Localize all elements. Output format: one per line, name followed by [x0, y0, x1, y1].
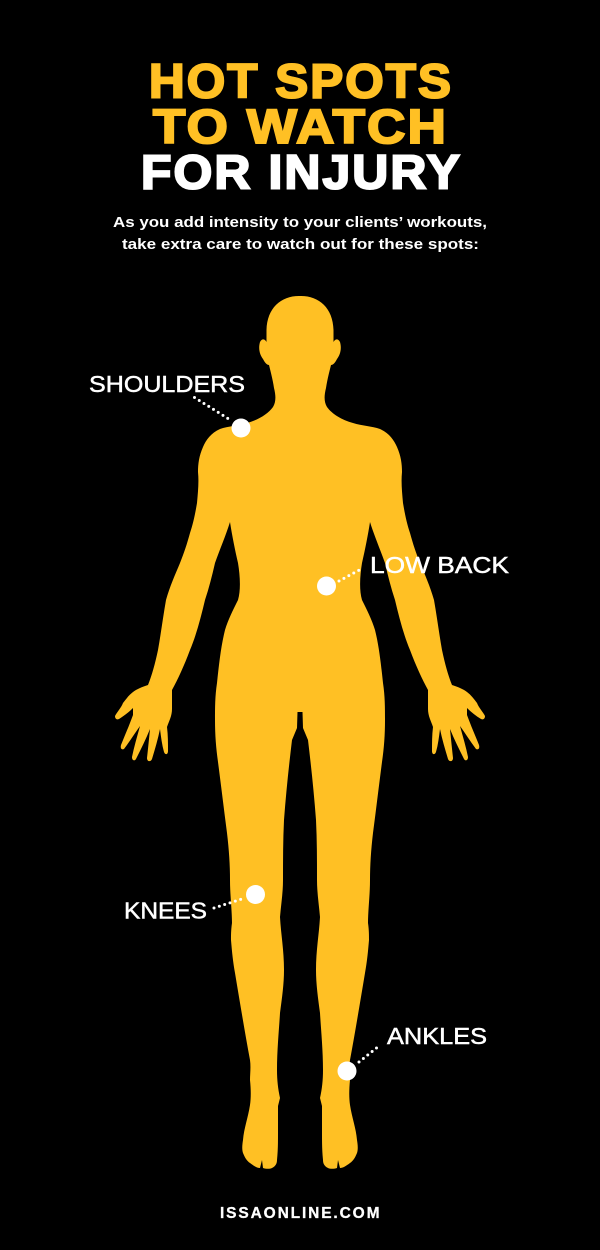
footer url: ISSAONLINE.COM [220, 1205, 380, 1222]
callout: low back: LOW BACK [370, 552, 509, 578]
title: HOT SPOTS [149, 56, 453, 108]
callout: shoulders: SHOULDERS [89, 371, 245, 397]
intro text: take extra care to watch out for these spots: [122, 236, 479, 253]
intro text: As you add intensity to your clients’ workouts, [113, 214, 487, 231]
callout: ankles: ANKLES [387, 1023, 487, 1049]
body silhouette [115, 296, 485, 1169]
callout: knees [124, 885, 265, 924]
intro text [113, 214, 487, 253]
callout: ankles [338, 1023, 487, 1080]
title: FOR INJURY [141, 146, 462, 200]
title [141, 56, 462, 200]
callout: low back [317, 552, 509, 596]
callout: shoulders [89, 371, 250, 438]
callout: knees: KNEES [124, 898, 207, 924]
title: TO WATCH [153, 101, 448, 154]
